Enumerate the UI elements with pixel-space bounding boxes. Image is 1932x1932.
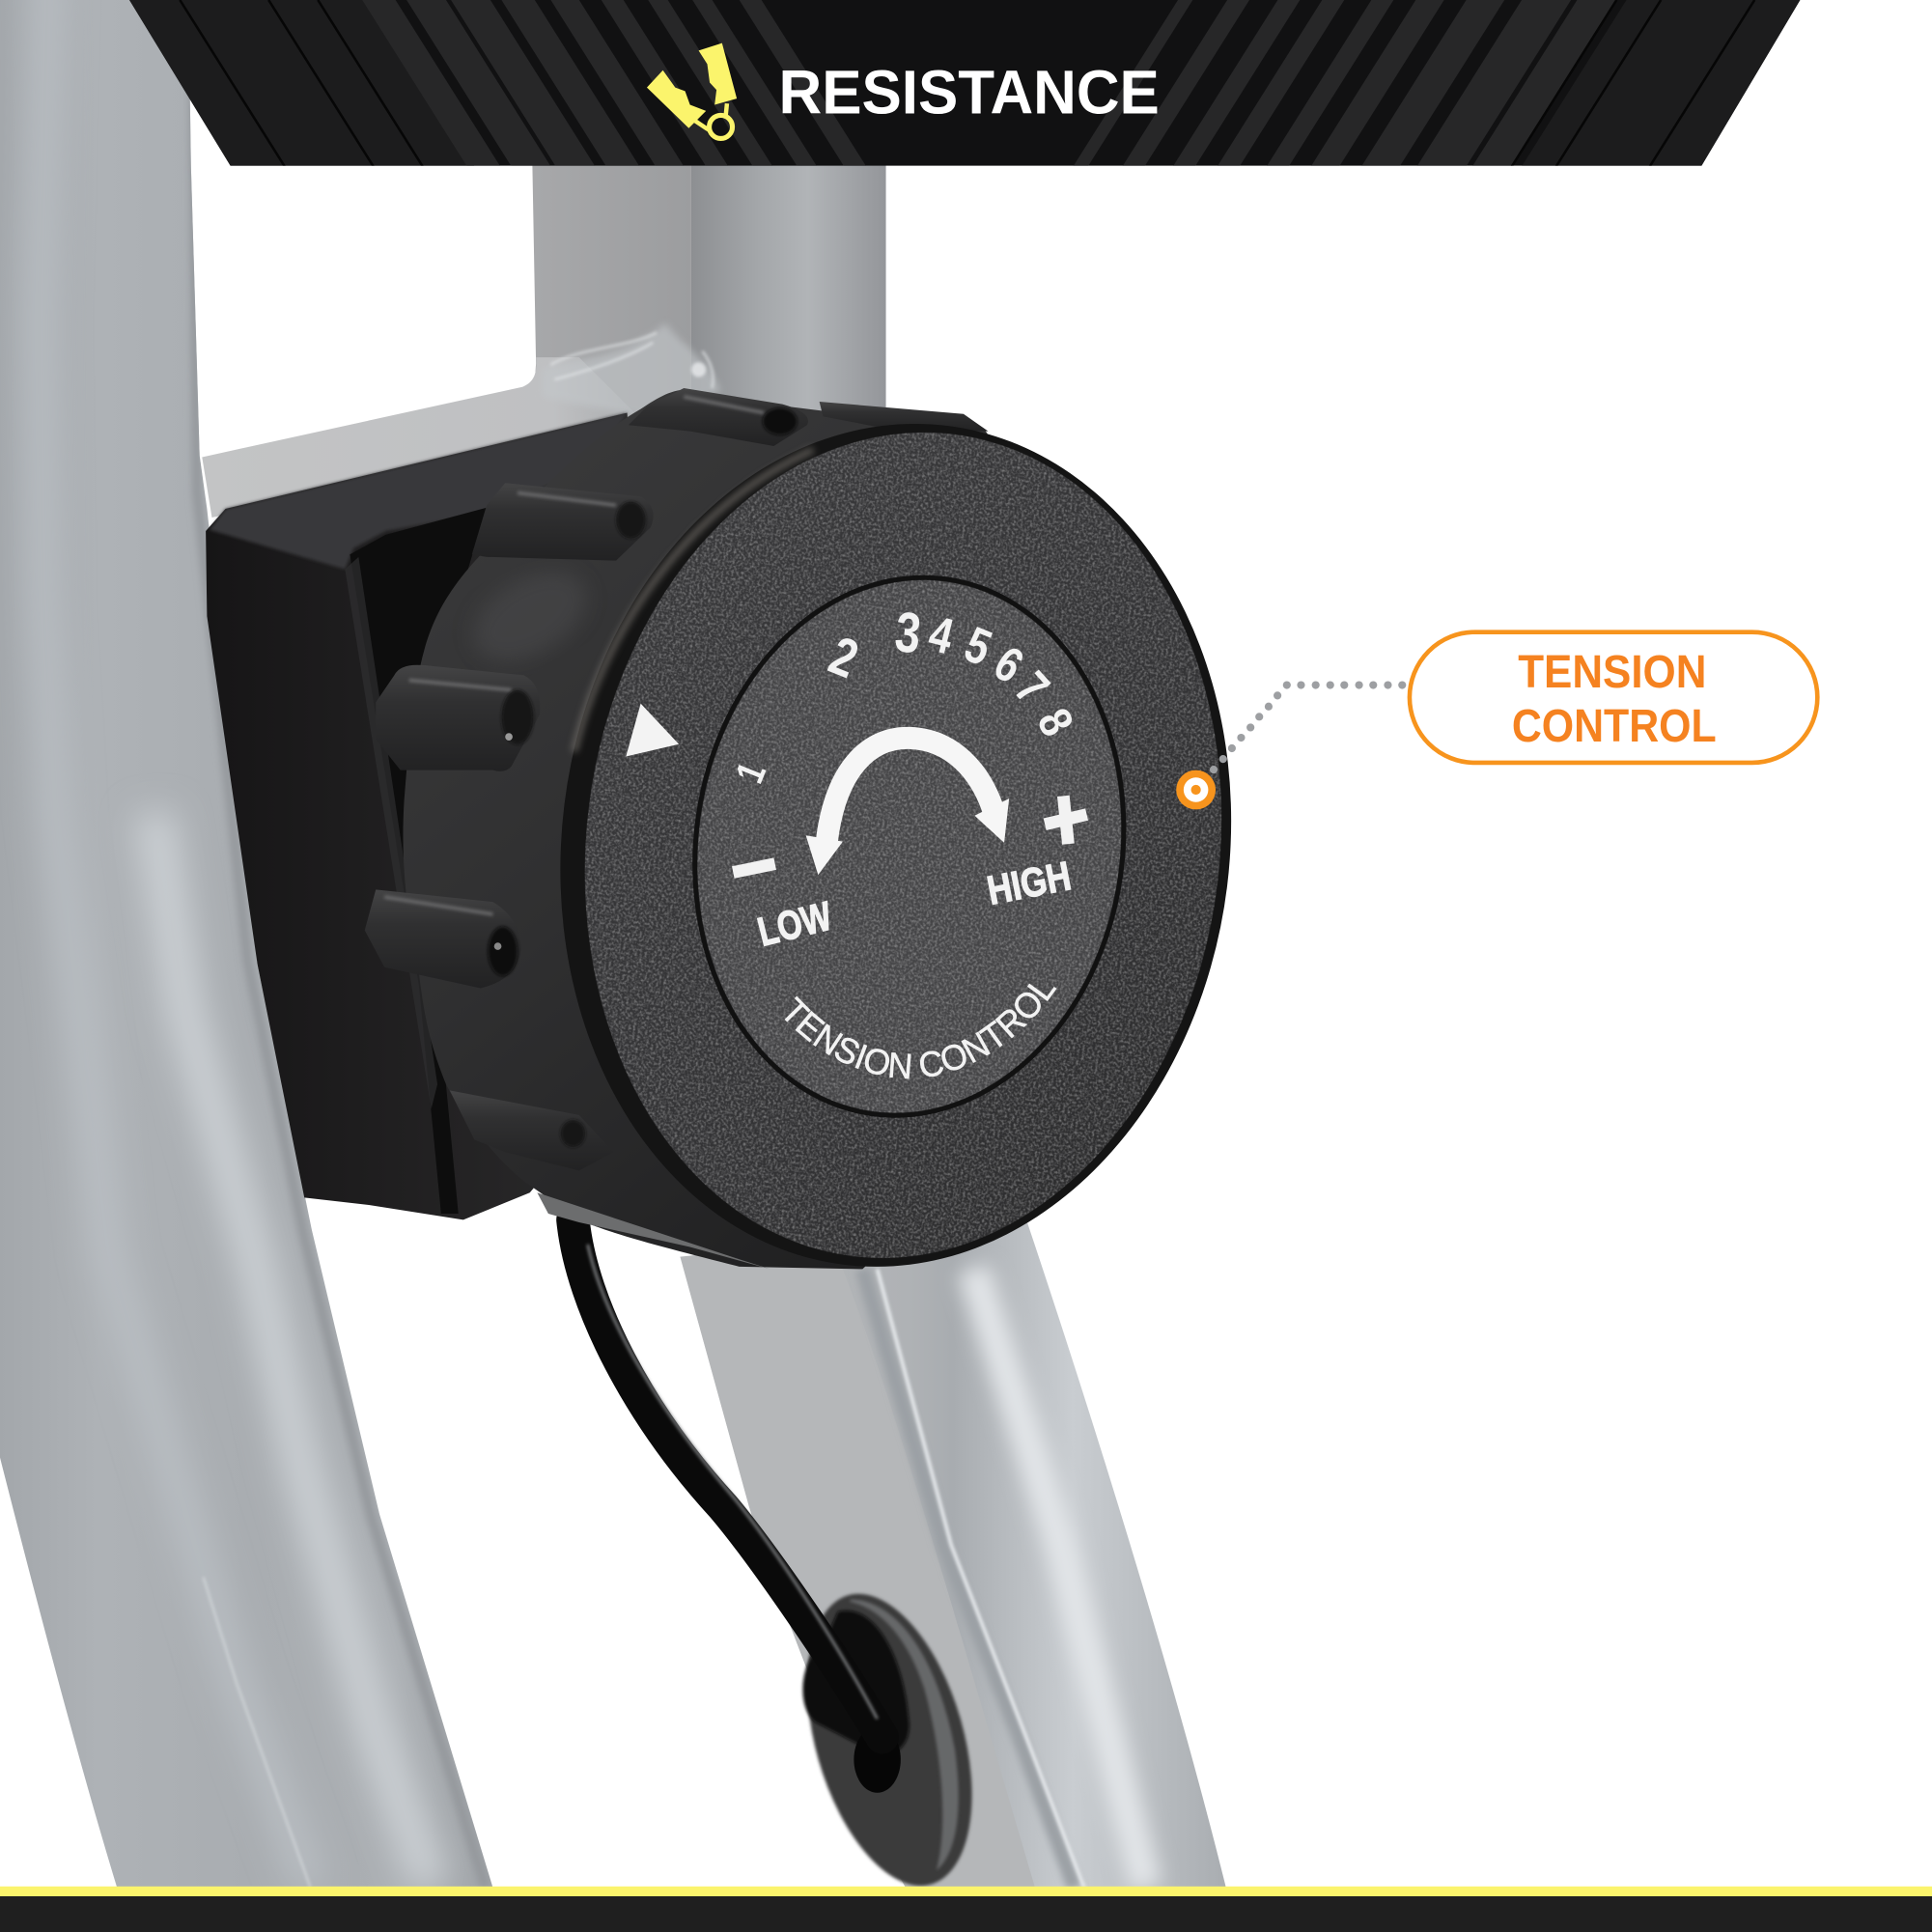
dial numbers: 5 bbox=[957, 616, 999, 677]
edge sheen on knob face bbox=[574, 450, 813, 751]
ring ribs bbox=[365, 388, 988, 1170]
resistance bracket bbox=[206, 413, 641, 1219]
minus sign bbox=[733, 864, 775, 873]
cable bbox=[573, 1219, 882, 1737]
dial numbers: 7 bbox=[1004, 661, 1060, 714]
rim of knob face bbox=[513, 385, 1278, 1305]
callout marker bbox=[1176, 770, 1216, 809]
curved tension control label: TENSION CONTROL bbox=[784, 983, 1056, 1079]
callout: tension control: TENSION bbox=[1518, 646, 1706, 698]
rib highlights and end caps bbox=[384, 397, 798, 1147]
left frame tube bbox=[0, 0, 492, 1888]
pointer triangle bbox=[626, 704, 679, 757]
grommet bbox=[777, 1575, 1002, 1905]
dial numbers: 2 bbox=[822, 625, 866, 689]
direction arrow bbox=[806, 738, 1009, 875]
high label: HIGH bbox=[984, 853, 1075, 913]
icon: resistance band grips bbox=[647, 43, 737, 138]
callout: tension control bbox=[1410, 632, 1817, 763]
dial numbers bbox=[727, 601, 1084, 789]
dial numbers: 4 bbox=[923, 605, 960, 666]
silver underside flange bbox=[537, 1192, 770, 1269]
dial numbers: 8 bbox=[1027, 700, 1084, 744]
callout: tension control: CONTROL bbox=[1512, 700, 1717, 752]
knob face bbox=[539, 396, 1268, 1295]
dial numbers: 1 bbox=[727, 756, 774, 789]
ring sheen bbox=[458, 553, 602, 679]
title: RESISTANCE bbox=[779, 57, 1160, 126]
header banner bbox=[129, 0, 1800, 166]
knurled ring body bbox=[403, 389, 1170, 1269]
dotted leader line bbox=[1210, 681, 1406, 773]
dial numbers: 6 bbox=[985, 635, 1033, 693]
low label: LOW bbox=[753, 893, 836, 955]
tension knob bbox=[365, 388, 1232, 1269]
rear upright tube bbox=[202, 160, 886, 518]
plus sign bbox=[1045, 796, 1087, 844]
lower frame tube bbox=[680, 1219, 1226, 1888]
bottom accent bar bbox=[0, 1887, 1932, 1932]
dial plate bbox=[658, 546, 1161, 1146]
dial numbers: 3 bbox=[892, 601, 924, 666]
